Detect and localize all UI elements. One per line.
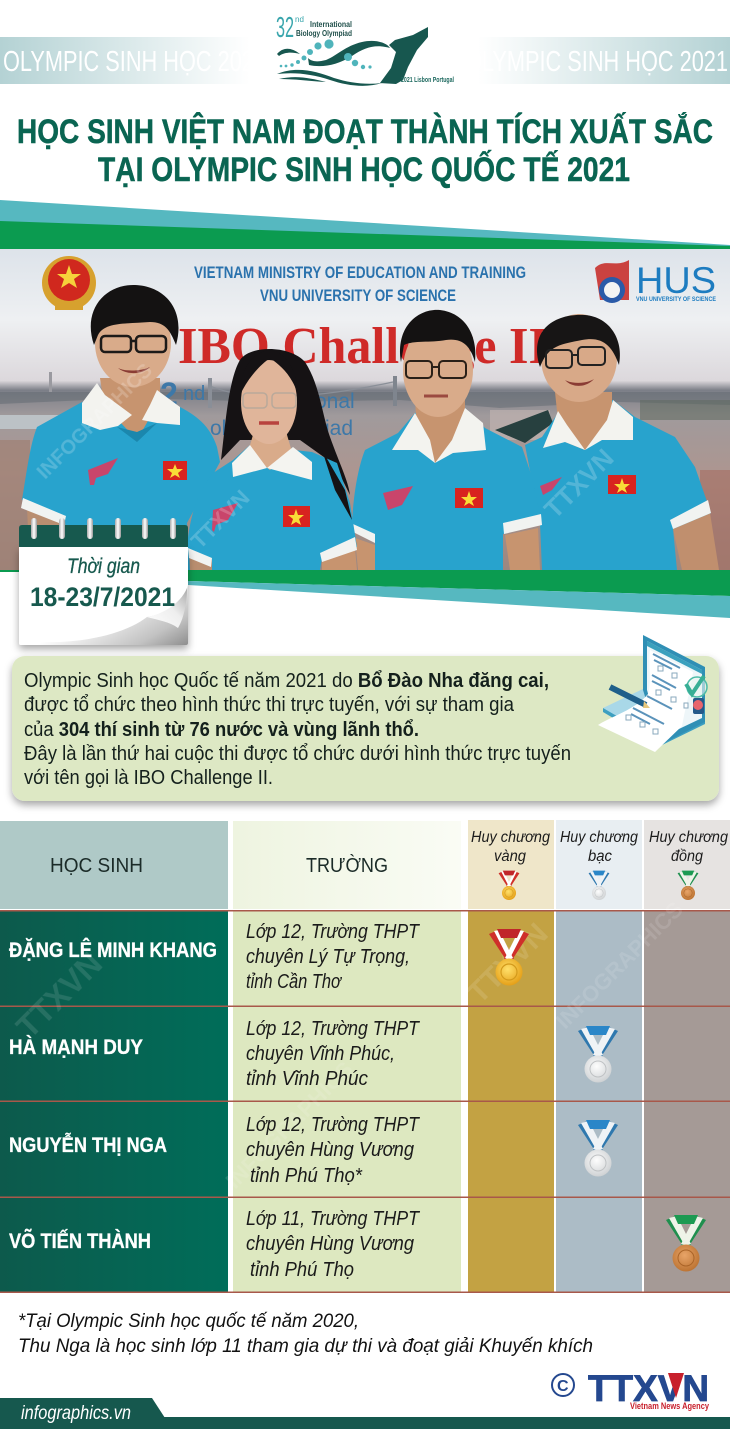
backdrop: 32nd International Biology Olympiad: 2: [160, 376, 178, 412]
state emblem: [42, 256, 96, 310]
calendar rings: [31, 518, 176, 539]
logo: 32nd International Biology Olympiad: nd: [295, 15, 304, 24]
table body colours: [0, 910, 730, 1293]
photo watermarks: TTXVN: [186, 485, 255, 554]
backdrop: 32nd International Biology Olympiad: nd: [183, 383, 205, 405]
backdrop: 32nd International Biology Olympiad: iad: [325, 417, 353, 440]
photo watermarks: TTXVN: [538, 443, 620, 524]
table header: Huy chương: [471, 829, 550, 846]
title: TẠI OLYMPIC SINH HỌC QUỐC TẾ 2021: [98, 150, 630, 189]
student 2: [187, 349, 357, 570]
footer bar: infographics.vn: [21, 1403, 131, 1424]
row: Đặng Lê Minh Khang: ĐẶNG LÊ MINH KHANG: [9, 938, 217, 962]
row: Hà Mạnh Duy: tỉnh Vĩnh Phúc: [246, 1068, 368, 1090]
table watermarks: INFOGRAPHICS: [221, 1057, 358, 1194]
table header: bạc: [588, 848, 612, 865]
footnote: [18, 1311, 593, 1357]
table watermarks: INFOGRAPHICS: [551, 897, 688, 1034]
backdrop heading: [194, 263, 526, 305]
backdrop: IBO Challenge II: IBO Challenge II: [178, 318, 548, 375]
row: Đặng Lê Minh Khang: [9, 921, 529, 993]
panel: intro text: Olympic Sinh học Quốc tế năm 2021 do Bổ Đào Nha đăng cai,: [24, 670, 549, 692]
table watermarks: TTXVN: [462, 917, 554, 1010]
table header: [0, 820, 730, 909]
row: Nguyễn Thị Nga: Lớp 12, Trường THPT: [246, 1114, 421, 1136]
date: 18-23/7/2021: [30, 582, 175, 612]
TTXVN logo: Vietnam News Agency: [630, 1401, 709, 1411]
table watermarks: [9, 897, 688, 1194]
table header: vàng: [494, 848, 526, 865]
team photo: [0, 249, 730, 570]
student 3: [352, 310, 542, 570]
photo backdrop: city skyline: [0, 372, 730, 570]
backdrop: 32nd International Biology Olympiad: onal: [315, 390, 355, 413]
footer bar: [0, 1398, 730, 1429]
HUS logo: [595, 260, 716, 303]
results table: [0, 820, 730, 1293]
bottom diagonal ribbon: [0, 570, 730, 618]
header banner: OLYMPIC SINH HỌC 2021: [3, 46, 266, 78]
student 4: [525, 314, 719, 570]
title: [17, 113, 713, 189]
row: Hà Mạnh Duy: chuyên Vĩnh Phúc,: [246, 1043, 395, 1065]
backdrop heading: VIETNAM MINISTRY OF EDUCATION AND TRAINING: [194, 263, 526, 282]
header banner: [0, 37, 730, 84]
footnote: Thu Nga là học sinh lớp 11 tham gia dự thi và đoạt giải Khuyến khích: [18, 1336, 593, 1357]
backdrop heading: VNU UNIVERSITY OF SCIENCE: [260, 286, 456, 305]
calendar page curl: [19, 547, 188, 642]
HUS logo: HUS: [636, 260, 716, 301]
top diagonal ribbon: [0, 200, 730, 249]
row: Đặng Lê Minh Khang: Lớp 12, Trường THPT: [246, 921, 421, 943]
table watermarks: TTXVN: [9, 945, 109, 1045]
time label: Thời gian: [67, 555, 140, 578]
logo: 32nd International Biology Olympiad: 2021 Lisbon Portugal: [401, 77, 454, 84]
panel: intro text: của 304 thí sinh từ 76 nước và vùng lãnh thổ.: [24, 719, 419, 741]
TTXVN logo: TTXVN: [588, 1368, 709, 1409]
row: Võ Tiến Thành: VÕ TIẾN THÀNH: [9, 1229, 151, 1253]
row: Đặng Lê Minh Khang: chuyên Lý Tự Trọng,: [246, 946, 410, 968]
calendar: time: [19, 518, 188, 645]
row: Võ Tiến Thành: chuyên Hùng Vương: [246, 1233, 414, 1255]
backdrop: 32nd International Biology Olympiad: [160, 376, 355, 440]
row: Nguyễn Thị Nga: chuyên Hùng Vương: [246, 1139, 414, 1161]
logo: 32nd International Biology Olympiad: [256, 8, 472, 86]
row: Võ Tiến Thành: [9, 1208, 706, 1281]
row: Đặng Lê Minh Khang: tỉnh Cần Thơ: [246, 971, 343, 993]
logo: 32nd International Biology Olympiad: Biology Olympiad: [296, 29, 352, 38]
panel: intro text: với tên gọi là IBO Challenge II.: [24, 767, 273, 789]
logo: 32nd International Biology Olympiad: 32: [276, 12, 294, 44]
table header: HỌC SINH: [50, 855, 143, 877]
panel: intro text: được tổ chức theo hình thức thi trực tuyến, với sự tham gia: [24, 694, 515, 716]
row: Hà Mạnh Duy: HÀ MẠNH DUY: [9, 1036, 143, 1059]
table header: Huy chương: [560, 829, 638, 846]
logo: 32nd International Biology Olympiad: International: [310, 20, 352, 29]
footnote: *Tại Olympic Sinh học quốc tế năm 2020,: [18, 1311, 359, 1332]
HUS logo: VNU UNIVERSITY OF SCIENCE: [636, 297, 716, 303]
panel: intro text: [12, 656, 719, 801]
TTXVN logo: C: [557, 1378, 569, 1395]
row: Võ Tiến Thành: Lớp 11, Trường THPT: [246, 1208, 421, 1230]
backdrop: 32nd International Biology Olympiad: ol: [210, 417, 226, 440]
panel: intro text: Đây là lần thứ hai cuộc thi được tổ chức dưới hình thức trực tuyến: [24, 743, 571, 765]
row: Hà Mạnh Duy: Lớp 12, Trường THPT: [246, 1018, 421, 1040]
row: Nguyễn Thị Nga: [9, 1114, 618, 1187]
table header: đồng: [671, 848, 703, 865]
row: Võ Tiến Thành: tỉnh Phú Thọ: [250, 1259, 354, 1281]
photo watermarks: INFOGRAPHICS: [33, 360, 157, 484]
icon: online exam tablet: [598, 635, 707, 752]
row: Hà Mạnh Duy: [9, 1018, 618, 1090]
row: Nguyễn Thị Nga: NGUYỄN THỊ NGA: [9, 1134, 167, 1157]
row: Nguyễn Thị Nga: tỉnh Phú Thọ*: [250, 1165, 363, 1187]
table header: TRƯỜNG: [306, 854, 388, 877]
dark shape on backdrop: [495, 410, 553, 443]
photo watermarks: [33, 360, 620, 554]
student 1: [21, 285, 220, 570]
